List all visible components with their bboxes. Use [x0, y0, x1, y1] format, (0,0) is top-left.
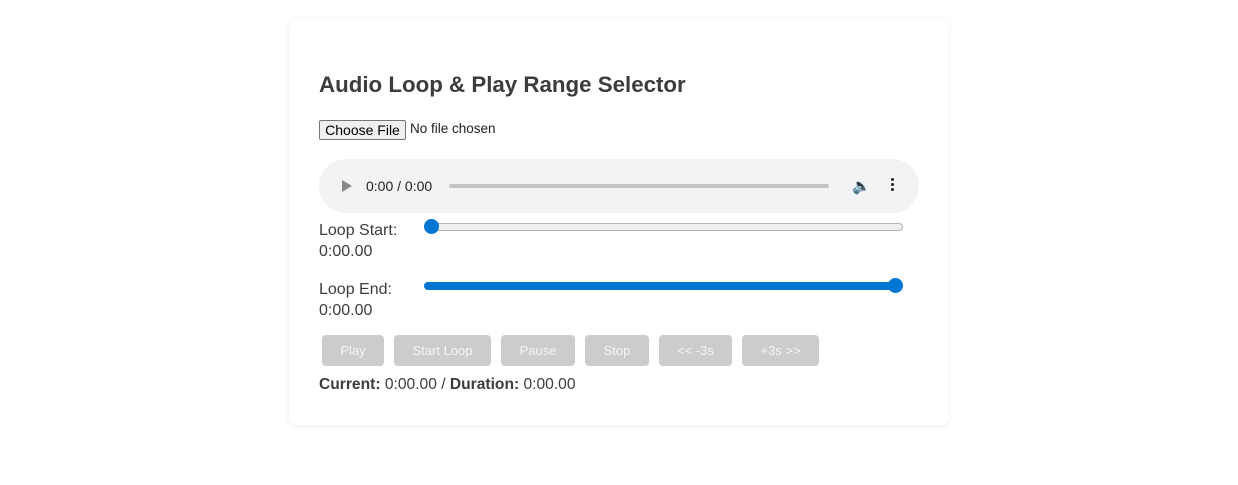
- panel: card: [289, 19, 949, 425]
- slider: loop start: [424, 219, 903, 234]
- buttons: +3s >>: [760, 343, 801, 358]
- loop end label: 0:00.00: [319, 302, 372, 319]
- file input: [319, 120, 496, 140]
- buttons: << -3s: [677, 343, 714, 358]
- icon: volume: 🔈: [852, 178, 871, 195]
- buttons: Start Loop: [412, 343, 472, 358]
- file input: No file chosen: [410, 121, 496, 136]
- buttons: Play: [340, 343, 366, 358]
- icon: play: [342, 180, 352, 192]
- buttons: Stop: [604, 343, 630, 358]
- loop start label: [319, 222, 397, 260]
- progress bar: [449, 184, 829, 188]
- loop start label: 0:00.00: [319, 243, 372, 260]
- file input: Choose File: [325, 122, 400, 138]
- audio player: 0:00 / 0:00: [366, 178, 432, 194]
- icon: menu: [891, 178, 894, 191]
- loop start label: Loop Start:: [319, 222, 397, 239]
- slider: loop end: [424, 278, 903, 293]
- title: Audio Loop & Play Range Selector: [319, 72, 686, 97]
- audio player: [319, 159, 919, 213]
- status text: Current: 0:00.00 / Duration: 0:00.00: [319, 376, 576, 393]
- loop end label: [319, 281, 392, 319]
- buttons: Pause: [520, 343, 556, 358]
- loop end label: Loop End:: [319, 281, 392, 298]
